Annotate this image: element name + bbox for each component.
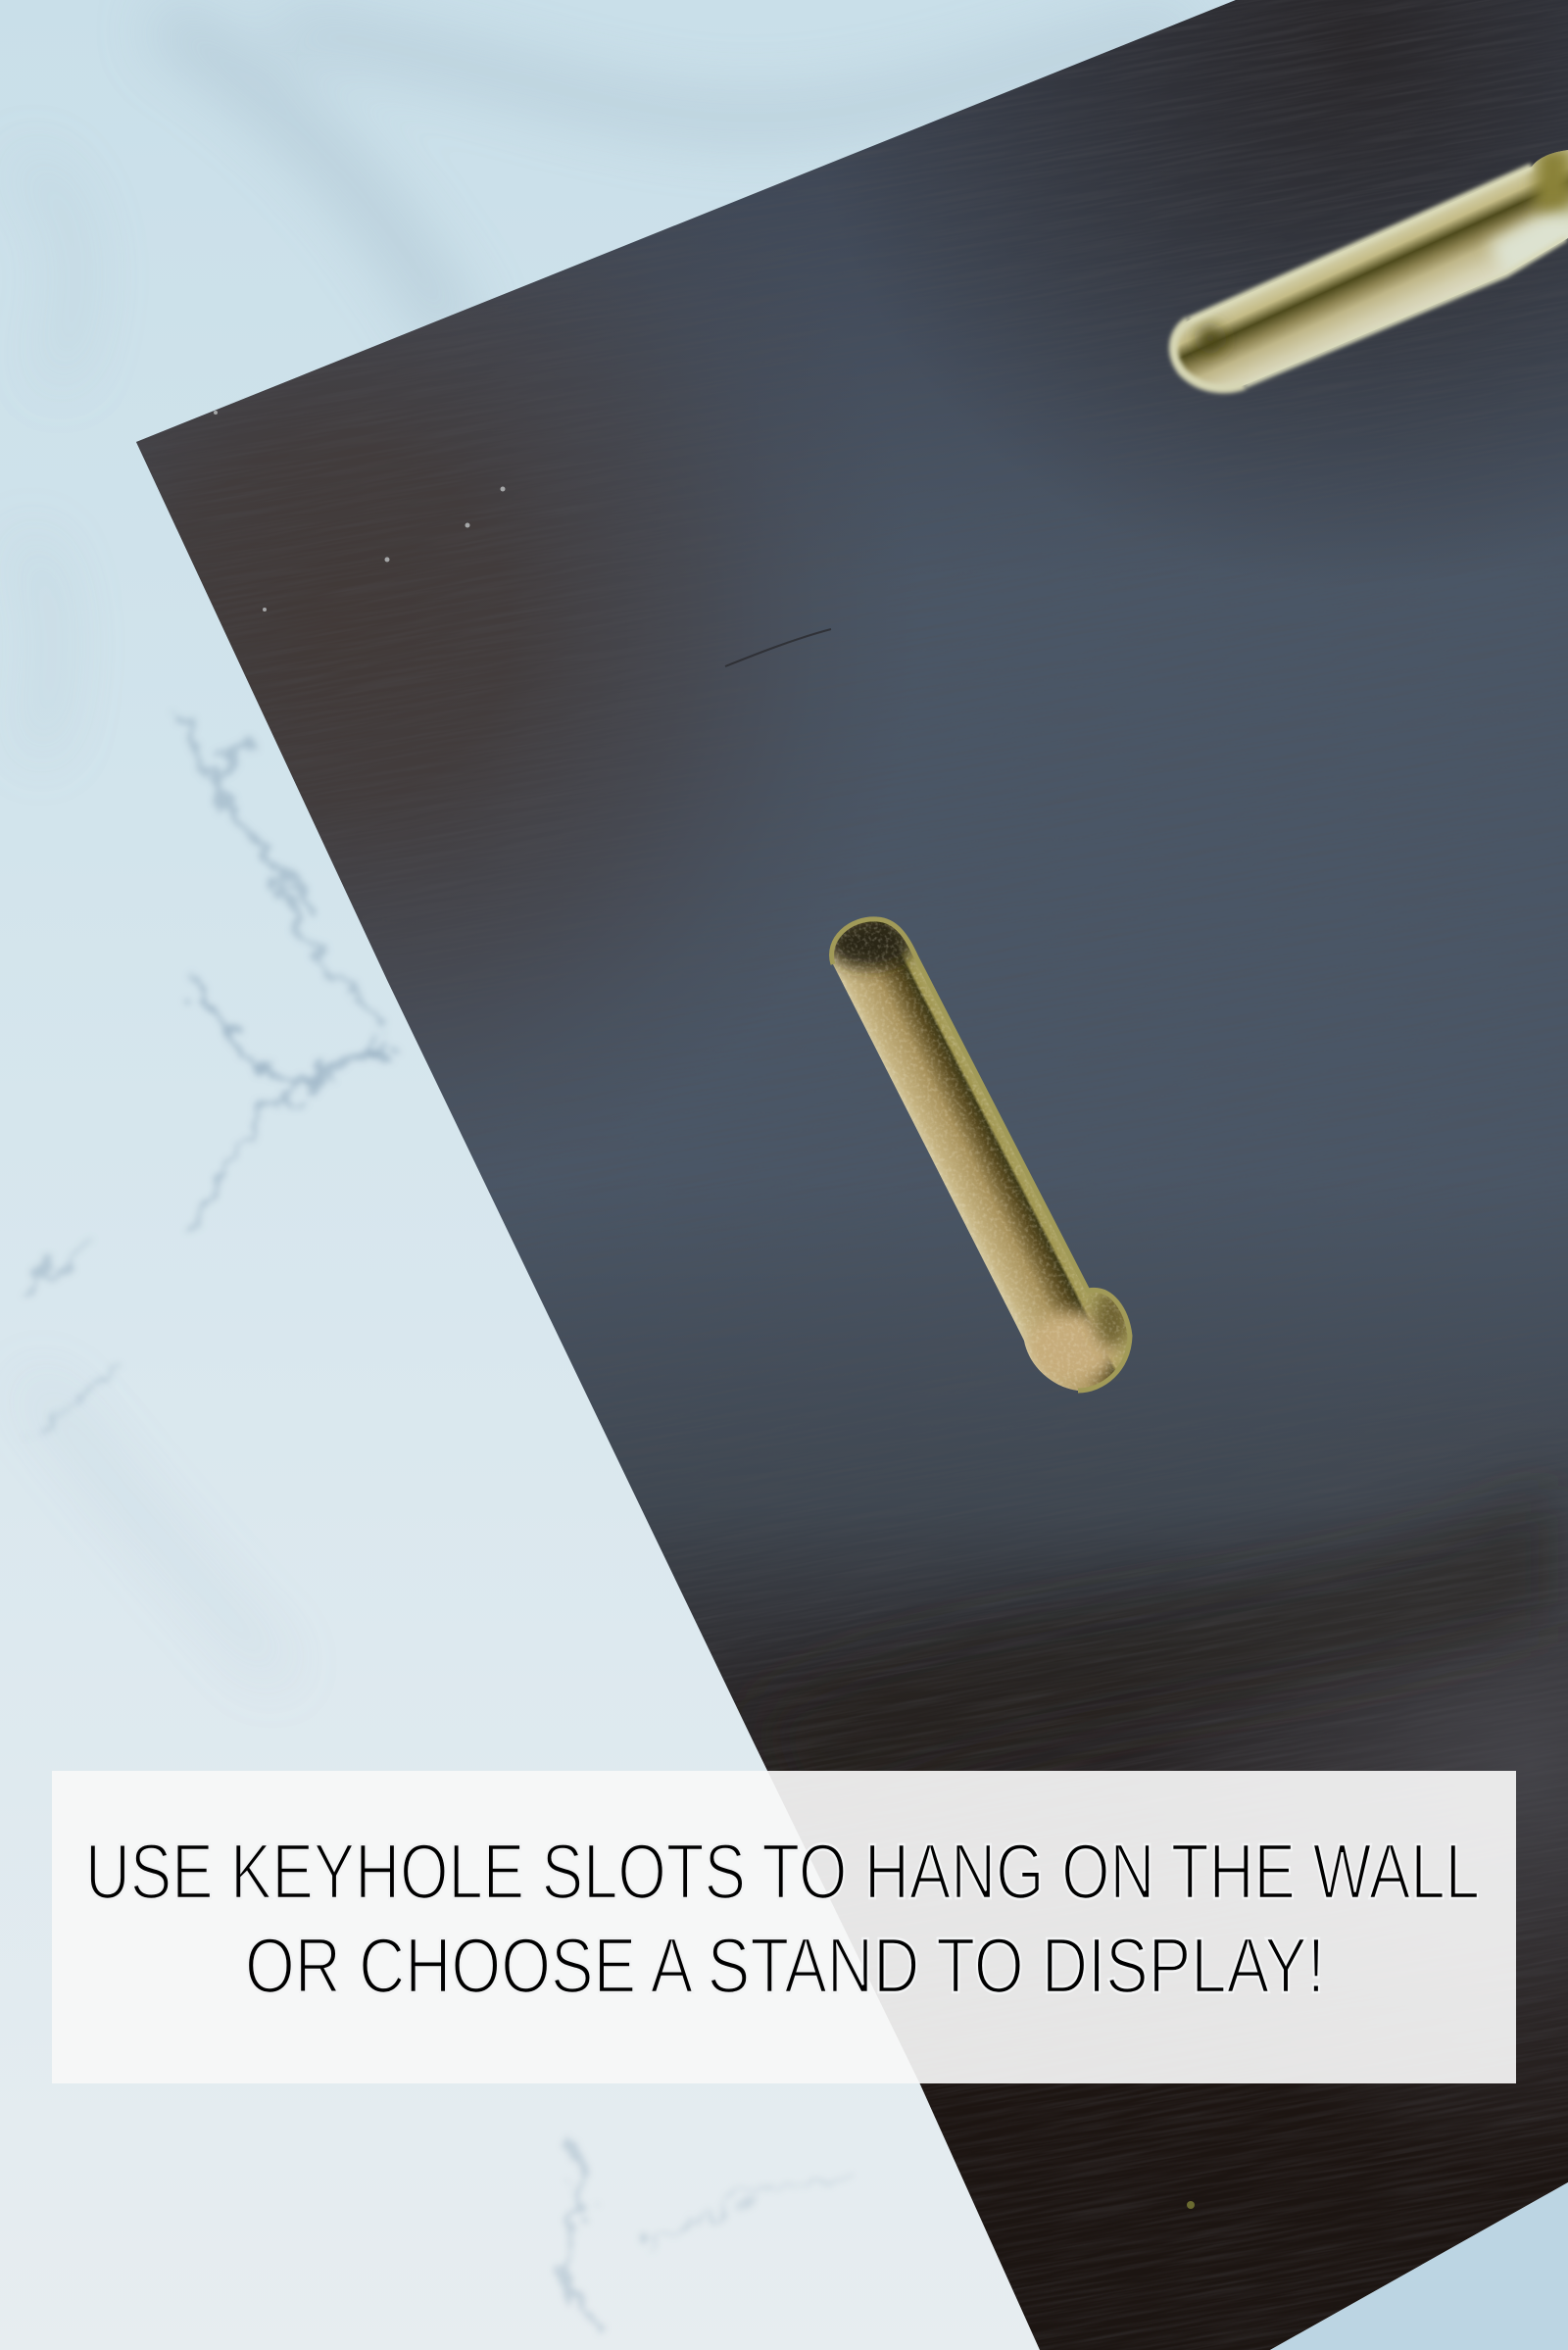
caption panel: [52, 1771, 1516, 2083]
caption text: [85, 1828, 1480, 2009]
keyhole slot: upper right: [1166, 137, 1568, 397]
caption text: OR CHOOSE A STAND TO DISPLAY!: [245, 1922, 1325, 2009]
scratch: [725, 629, 831, 666]
keyhole slot: centre: [829, 916, 1133, 1394]
specks: [214, 411, 506, 612]
marble corner, lower right: [1270, 2182, 1568, 2350]
slot rim: [832, 919, 1130, 1391]
wood grain: [488, 8, 1568, 2350]
